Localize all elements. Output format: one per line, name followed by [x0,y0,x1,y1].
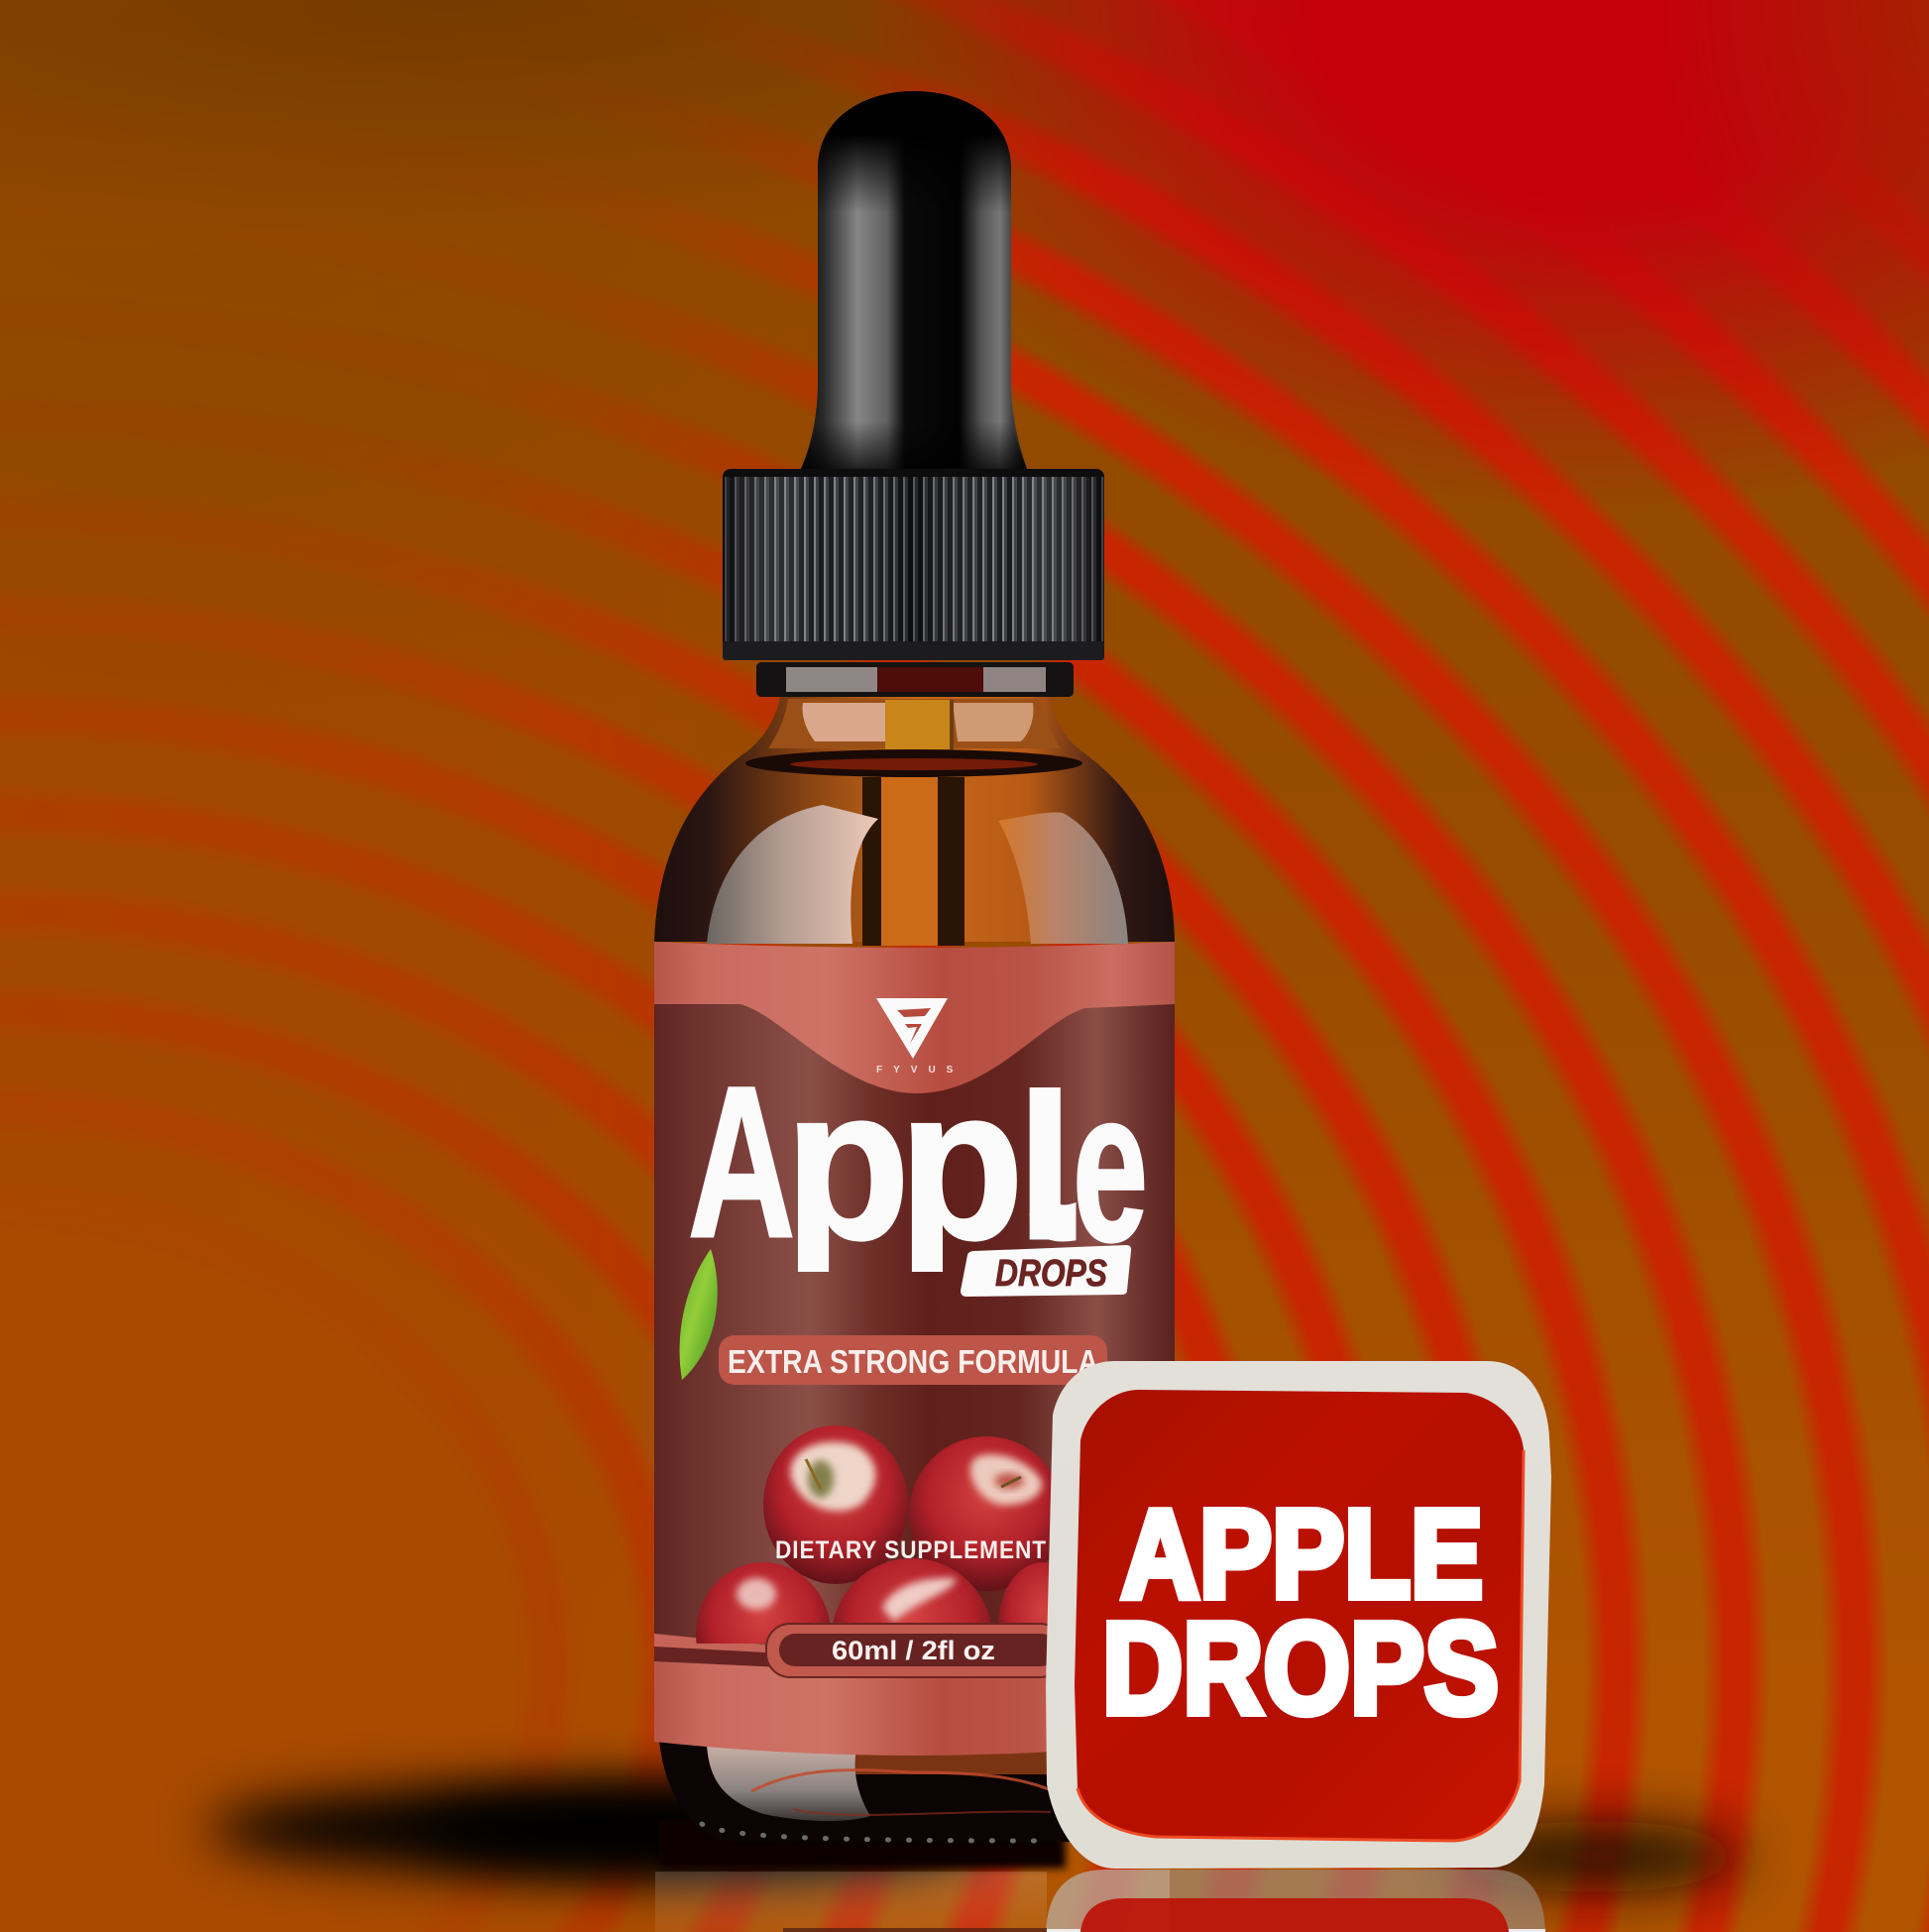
card face rim light [1078,1450,1524,1841]
product card [1046,1361,1551,1869]
band stripes [654,1634,783,1653]
volume band: 60ml / 2fl oz [832,1636,995,1665]
dark label panel [654,1004,1175,1664]
DROPS badge: DROPS [995,1253,1107,1295]
brand name [690,1086,1144,1272]
ground shadow [208,1785,1745,1892]
floor reflection [655,1870,1545,1932]
apples illustration [696,1425,1051,1644]
base dots [702,1824,1051,1841]
dietary supplement text: DIETARY SUPPLEMENT [775,1536,1047,1564]
brand name: A [688,1041,795,1283]
glass base [658,1735,1090,1842]
card title: DROPS [1102,1595,1499,1741]
product label [654,942,1175,1756]
card title: APPLE [1121,1484,1483,1624]
glass highlights [707,805,878,944]
formula pill: EXTRA STRONG FORMULA [728,1343,1098,1380]
brand name: e [1073,1047,1148,1287]
brand logo [876,998,964,1076]
brand name: ppl [785,1043,1074,1284]
collar ring [756,662,1074,697]
ribbed cap [723,469,1104,660]
glass neck and shoulders [654,697,1175,946]
brand logo: FYVUS [876,1065,964,1076]
formula pill [719,1335,1107,1385]
red card face [1075,1390,1524,1841]
DROPS badge [961,1245,1131,1297]
dropper bulb [801,91,1027,469]
dropper bottle [654,91,1175,1842]
card title [1102,1484,1499,1741]
icon: green leaf [680,1249,718,1380]
dropper tube [862,777,964,946]
volume band [766,1624,1064,1677]
